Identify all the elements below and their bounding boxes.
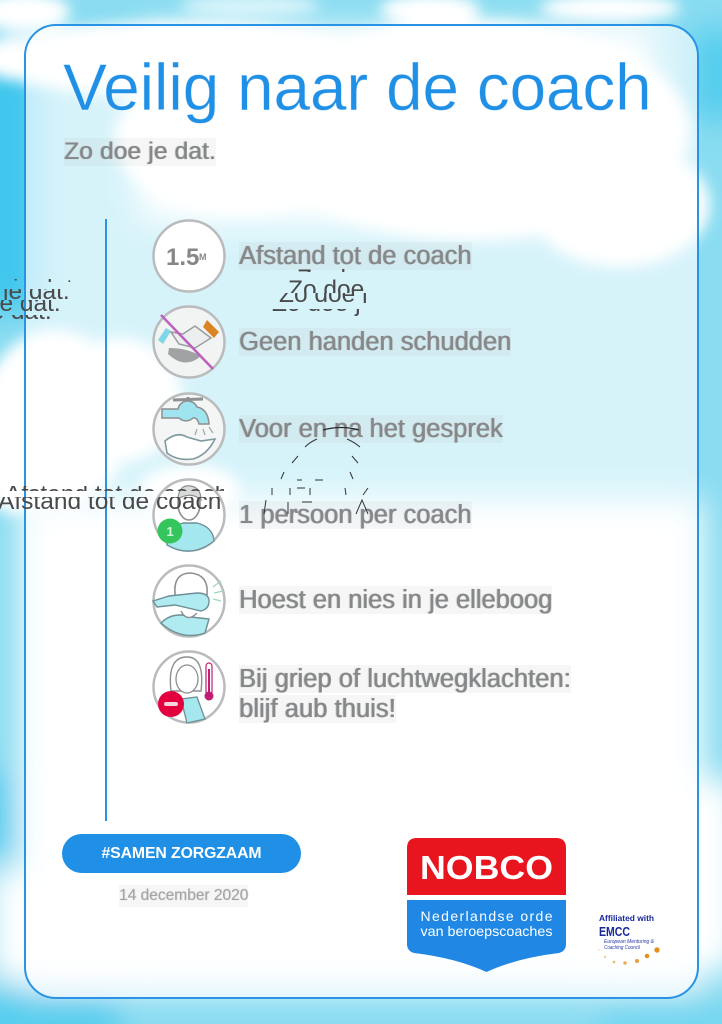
title: Veilig naar de coach	[63, 50, 651, 124]
item: hoest	[152, 564, 552, 638]
icon: 1.5 m	[152, 219, 226, 293]
logo: EMCC: EMCC	[599, 924, 630, 939]
stray text slices: Afstand tot de coach	[0, 486, 224, 510]
icon: 1.5 m: 1.5	[166, 244, 199, 271]
logo: EMCC	[598, 914, 660, 965]
logo: NOBCO	[407, 838, 566, 972]
label: Voor en na het gesprek	[239, 415, 503, 443]
vertical line	[105, 219, 107, 821]
date: 14 december 2020	[119, 887, 248, 904]
logo: EMCC: European Mentoring &	[604, 939, 655, 945]
stray dashed distance circle with 1.5 M	[264, 426, 368, 514]
icon: one person	[152, 478, 226, 552]
label: blijf aub thuis!	[239, 695, 396, 723]
logo: EMCC: Coaching Council	[604, 945, 641, 951]
label: Bij griep of luchtwegklachten:	[239, 665, 571, 693]
icon: fever	[152, 650, 226, 724]
icon: one person: 1	[166, 524, 174, 539]
stray text slices: je dat	[0, 279, 75, 320]
hashtag button: #SAMEN ZORGZAAM	[102, 845, 261, 862]
icon: tap and hand	[152, 392, 226, 466]
logo: EMCC: Affiliated with	[599, 914, 654, 923]
item: griep	[152, 650, 571, 724]
logo: NOBCO: NOBCO	[420, 849, 553, 886]
logo: NOBCO: Nederlandse orde	[420, 908, 553, 924]
label	[239, 665, 571, 723]
stray text slices: Zo doe	[272, 269, 368, 316]
label: 1 persoon per coach	[239, 501, 472, 529]
icon: no handshake	[152, 305, 226, 379]
icon: coughing in elbow	[152, 564, 226, 638]
item: afstand	[152, 219, 472, 293]
hashtag button	[62, 834, 301, 873]
logo: NOBCO: van beroepscoaches	[420, 923, 552, 939]
item: handen	[152, 305, 511, 379]
icon: 1.5 m: M	[199, 252, 206, 262]
subtitle: Zo doe je dat.	[64, 138, 216, 165]
label: Afstand tot de coach	[239, 242, 472, 270]
item: 1 persoon	[152, 478, 472, 552]
label: Geen handen schudden	[239, 328, 511, 356]
item: handen wassen	[152, 392, 504, 466]
label: Hoest en nies in je elleboog	[239, 586, 552, 614]
